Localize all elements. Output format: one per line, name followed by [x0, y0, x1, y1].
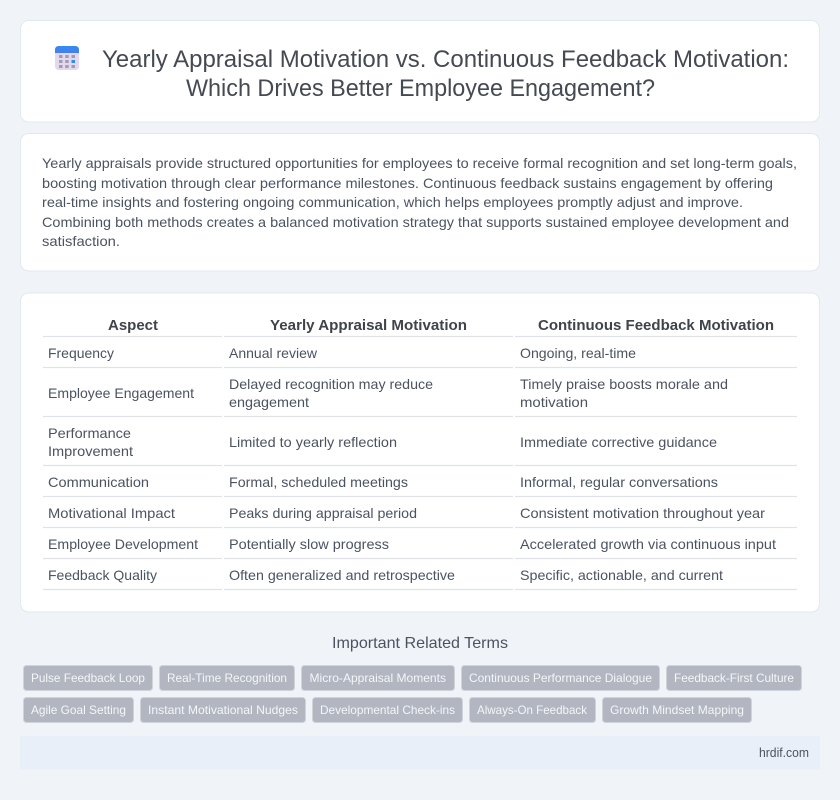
- row: employee development: [48, 536, 776, 552]
- row: frequency: Annual review: [229, 345, 318, 361]
- row: frequency: Frequency: [48, 345, 114, 361]
- row: feedback quality: Often generalized and retrospective: [229, 567, 455, 583]
- tag: developmental check-ins: Developmental Check-ins: [320, 703, 455, 717]
- row: communication: Formal, scheduled meetings: [229, 474, 408, 490]
- tag: developmental check-ins: [312, 698, 462, 722]
- row: employee engagement: motivation: [520, 394, 588, 410]
- row: communication: [48, 474, 718, 490]
- row: frequency: Ongoing, real-time: [520, 345, 636, 361]
- title: Yearly Appraisal Motivation vs. Continuous Feedback Motivation:: [102, 46, 789, 73]
- row: employee development: Accelerated growth via continuous input: [520, 536, 776, 552]
- tag: agile goal setting: Agile Goal Setting: [31, 703, 126, 717]
- tag: instant motivational nudges: Instant Motivational Nudges: [148, 703, 298, 717]
- panel: introduction: [20, 134, 820, 271]
- row: motivational impact: Consistent motivation throughout year: [520, 505, 765, 521]
- table header row: Yearly Appraisal Motivation: [270, 318, 467, 334]
- title: [102, 46, 789, 102]
- row: performance improvement: Improvement: [48, 443, 133, 459]
- text block: introduction paragraph: Yearly appraisals provide structured opportunities for employees to receive formal recognition and set long-term goals,: [42, 155, 797, 171]
- row: feedback quality: [48, 567, 723, 583]
- row: employee development: Employee Development: [48, 536, 198, 552]
- row: motivational impact: [48, 505, 765, 521]
- row: frequency: [48, 345, 636, 361]
- tag: growth mindset mapping: [602, 698, 752, 722]
- tag: continuous performance dialogue: [462, 666, 660, 690]
- table header row: [108, 318, 774, 334]
- row: motivational impact: Peaks during appraisal period: [229, 505, 417, 521]
- row: performance improvement: Limited to yearly reflection: [229, 434, 397, 450]
- icon: calendar: [55, 46, 79, 70]
- row: performance improvement: Immediate corrective guidance: [520, 434, 717, 450]
- tag: always-on feedback: Always-On Feedback: [477, 703, 588, 717]
- text block: introduction paragraph: [42, 155, 797, 249]
- text block: introduction paragraph: real-time insights and fostering ongoing communication, which helps employees promptly adjust and improve.: [42, 194, 743, 210]
- row: employee engagement: Delayed recognition may reduce: [229, 376, 433, 392]
- text block: introduction paragraph: boosting motivation through clear performance milestones. Continuous feedback sustains engagement by offering: [42, 175, 773, 191]
- row: employee development: Potentially slow progress: [229, 536, 389, 552]
- row: performance improvement: [48, 425, 717, 459]
- tag: feedback-first culture: [666, 666, 802, 690]
- row: feedback quality: Feedback Quality: [48, 567, 157, 583]
- tag: instant motivational nudges: [140, 698, 306, 722]
- tag: pulse feedback loop: Pulse Feedback Loop: [31, 671, 145, 685]
- row: feedback quality: Specific, actionable, and current: [520, 567, 723, 583]
- row: employee engagement: [48, 376, 728, 410]
- tags: related terms: [24, 666, 802, 722]
- footer: hrdif.com: [759, 746, 809, 760]
- tag: agile goal setting: [24, 698, 134, 722]
- row: performance improvement: Performance: [48, 425, 131, 441]
- row: employee engagement: Employee Engagement: [48, 385, 194, 401]
- row: employee engagement: engagement: [229, 394, 309, 410]
- tag: micro-appraisal moments: Micro-Appraisal Moments: [310, 671, 446, 685]
- row: motivational impact: Motivational Impact: [48, 505, 175, 521]
- heading: important related terms: Important Related Terms: [332, 635, 508, 652]
- tag: feedback-first culture: Feedback-First Culture: [674, 671, 794, 685]
- panel: header: [20, 20, 820, 122]
- tag: continuous performance dialogue: Continuous Performance Dialogue: [469, 671, 652, 685]
- tag: real-time recognition: Real-Time Recognition: [167, 671, 287, 685]
- table header row: Aspect: [108, 318, 158, 334]
- table header row: Continuous Feedback Motivation: [538, 318, 774, 334]
- tag: pulse feedback loop: [24, 666, 152, 690]
- tag: always-on feedback: [470, 698, 596, 722]
- text block: introduction paragraph: Combining both methods creates a balanced motivation strategy that supports sustained employee development and: [42, 214, 789, 230]
- tag: real-time recognition: [160, 666, 294, 690]
- row: communication: Communication: [48, 474, 149, 490]
- footer: [20, 736, 820, 770]
- panel: comparison table: [20, 293, 820, 612]
- title: Which Drives Better Employee Engagement?: [186, 75, 655, 102]
- row: employee engagement: Timely praise boosts morale and: [520, 376, 728, 392]
- text block: introduction paragraph: satisfaction.: [42, 233, 120, 249]
- tag: micro-appraisal moments: [302, 666, 454, 690]
- tag: growth mindset mapping: Growth Mindset Mapping: [610, 703, 744, 717]
- row: communication: Informal, regular conversations: [520, 474, 718, 490]
